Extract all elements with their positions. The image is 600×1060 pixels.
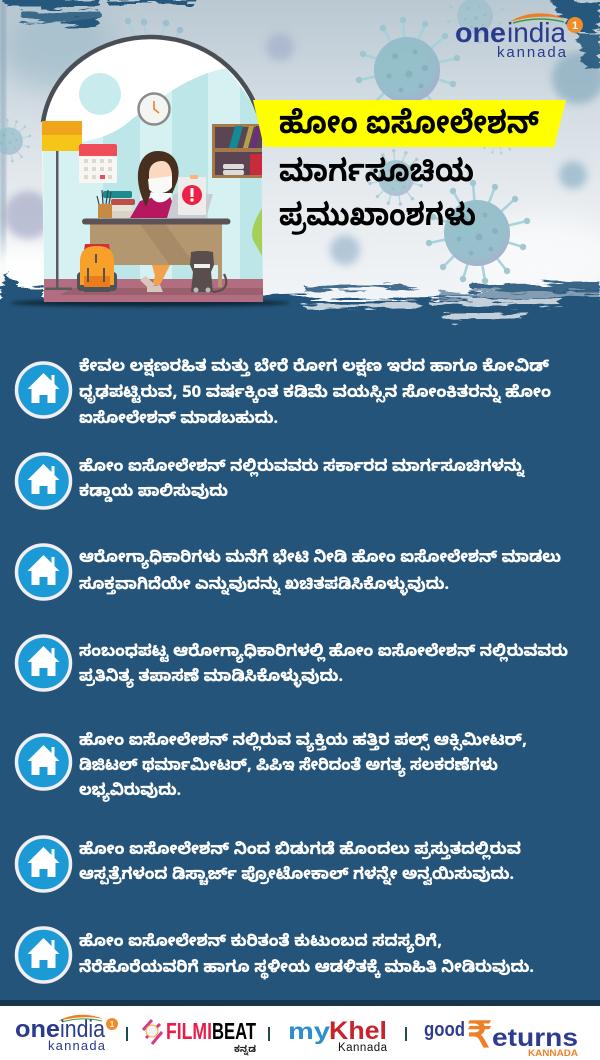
item 2 text: ಹೋಂ ಐಸೋಲೇಶನ್ ನಲ್ಲಿರುವವರು ಸರ್ಕಾರದ ಮಾರ್ಗಸೂಚಿಗಳನ್ನು [79, 458, 525, 480]
icon: home [16, 928, 70, 982]
item 4 text: ಪ್ರತಿನಿತ್ಯ ತಪಾಸಣೆ ಮಾಡಿಸಿಕೊಳ್ಳುವುದು. [79, 668, 343, 690]
footer divider [126, 1027, 128, 1041]
wall [43, 68, 263, 302]
icon: home [16, 636, 70, 690]
arch border [43, 37, 261, 122]
item 3 [16, 545, 561, 599]
item 7 text [79, 933, 534, 981]
title banner: yellow strip [253, 100, 566, 147]
body panel background [0, 302, 600, 1006]
arch sky [42, 37, 263, 302]
clock [138, 94, 170, 124]
footer logo: goodreturns: KANNADA [528, 1048, 578, 1059]
item 7 [16, 928, 534, 982]
icon: home [16, 735, 70, 789]
title line 2: ಮಾರ್ಗಸೂಚಿಯ [279, 155, 474, 198]
footer divider [268, 1027, 270, 1041]
item 5 text: ಹೋಂ ಐಸೋಲೇಶನ್ ನಲ್ಲಿರುವ ವ್ಯಕ್ತಿಯ ಹತ್ತಿರ ಪಲ್ಸ್ ಆಕ್ಸಿಮೀಟರ್, [79, 732, 527, 754]
item 7 text: ಹೋಂ ಐಸೋಲೇಶನ್ ಕುರಿತಂತೆ ಕುಟುಂಬದ ಸದಸ್ಯರಿಗೆ, [79, 933, 442, 955]
item 3 text [79, 549, 561, 598]
virus stalks above arch [125, 18, 183, 40]
footer bar [0, 1000, 600, 1060]
icon: home [16, 454, 70, 508]
virus: small top [447, 0, 504, 44]
item 4 text [79, 643, 568, 690]
calendar [79, 144, 117, 183]
item 1 text: ಕೇವಲ ಲಕ್ಷಣರಹಿತ ಮತ್ತು ಬೇರೆ ರೋಗ ಲಕ್ಷಣ ಇರದ ಹಾಗೂ ಕೋವಿಡ್ [79, 358, 550, 380]
item 1 [16, 358, 551, 432]
brush edge: banner bottom [0, 274, 600, 320]
item 5 text: ಲಭ್ಯವಿರುವುದು. [79, 782, 181, 804]
arch shadow [10, 300, 290, 306]
footer logo: goodreturns: good [424, 1019, 465, 1041]
footer logo: oneindia kannada [15, 1015, 118, 1053]
floor [44, 279, 263, 302]
icon: home [16, 545, 70, 599]
item 1 text [79, 358, 551, 432]
illustration: arch window [42, 37, 263, 302]
floor lamp [42, 121, 82, 290]
item 6 text: ಹೋಂ ಐಸೋಲೇಶನ್ ನಿಂದ ಬಿಡುಗಡೆ ಹೊಂದಲು ಪ್ರಸ್ತುತದಲ್ಲಿರುವ [79, 841, 521, 863]
background: top virus banner [0, 0, 600, 305]
logo: oneindia kannada top: 1 [572, 20, 578, 32]
rupee sign: ₹ [467, 1014, 492, 1055]
woman wearing mask [130, 151, 180, 218]
desk [82, 218, 230, 287]
title line 1: ಹೋಂ ಐಸೋಲೇಶನ್ [279, 107, 540, 150]
footer logo: filmibeat: FILMI [166, 1018, 212, 1044]
footer logo: mykhel: Khel [329, 1017, 387, 1045]
logo: oneindia kannada top: kannada [497, 44, 567, 61]
item 4 [16, 636, 568, 690]
item 1 text: ಐಸೋಲೇಶನ್ ಮಾಡಬಹುದು. [79, 410, 278, 432]
item 1 text: ಧೃಢಪಟ್ಟಿರುವ, 50 ವರ್ಷಕ್ಕಿಂತ ಕಡಿಮೆ ವಯಸ್ಸಿನ ಸೋಂಕಿತರನ್ನು ಹೋಂ [79, 384, 551, 406]
item 3 text: ಸೂಕ್ತವಾಗಿದೆಯೇ ಎನ್ನುವುದನ್ನು ಖಚಿತಪಡಿಸಿಕೊಳ್ಳುವುದು. [79, 576, 449, 598]
logo: oneindia kannada top: one [455, 17, 506, 48]
virus: behind title [368, 149, 425, 206]
footer logo: mykhel: my [288, 1018, 330, 1044]
virus: left edge [0, 119, 31, 162]
item 5 text [79, 732, 527, 804]
footer logo: oneindia kannada: india [60, 1016, 106, 1043]
footer logo: goodreturns: eturns [492, 1024, 578, 1052]
footer divider [405, 1027, 407, 1041]
cat [190, 251, 226, 292]
footer logo: oneindia kannada: 1 [110, 1020, 115, 1029]
item 3 text: ಆರೋಗ್ಯಾಧಿಕಾರಿಗಳು ಮನೆಗೆ ಭೇಟಿ ನೀಡಿ ಹೋಂ ಐಸೋಲೇಶನ್ ಮಾಡಲು [79, 549, 561, 571]
virus: large upper [356, 17, 460, 121]
plant edge [252, 208, 262, 256]
books and pencil cup [97, 190, 135, 218]
footer logo: oneindia kannada: kannada [48, 1038, 106, 1053]
footer logo: oneindia kannada: one [15, 1016, 60, 1043]
wall circle [79, 73, 121, 115]
backpack [77, 244, 117, 292]
brush lights over panel edge [300, 298, 560, 320]
footer logo: filmibeat: BEAT [212, 1018, 256, 1044]
wall stripes [103, 60, 263, 285]
title line 3: ಪ್ರಮುಖಾಂಶಗಳು [279, 199, 476, 242]
blurred virus spots [4, 33, 600, 265]
footer logo: filmibeat [143, 1018, 256, 1057]
icon: home [16, 837, 70, 891]
item 5 [16, 732, 527, 804]
laptop and warning sign [167, 175, 213, 218]
footer logo: filmibeat: ಕನ್ನಡ [234, 1044, 256, 1057]
virus: small title right [478, 113, 519, 154]
bookshelf [212, 124, 262, 178]
footer logo: mykhel: Kannada [338, 1042, 388, 1054]
legs and slippers [140, 265, 170, 292]
item 2 text [79, 458, 525, 505]
footer logo: mykhel [288, 1017, 388, 1054]
item 4 text: ಸಂಬಂಧಪಟ್ಟ ಆರೋಗ್ಯಾಧಿಕಾರಿಗಳಲ್ಲಿ ಹೋಂ ಐಸೋಲೇಶನ್ ನಲ್ಲಿರುವವರು [79, 643, 568, 665]
item 6 [16, 837, 521, 891]
brush edge: banner top [6, 0, 600, 70]
item 7 text: ನೆರೆಹೊರೆಯವರಿಗೆ ಹಾಗೂ ಸ್ಥಳೀಯ ಆಡಳಿತಕ್ಕೆ ಮಾಹಿತಿ ನೀಡಿರುವುದು. [79, 959, 534, 981]
logo: oneindia kannada top: india [507, 17, 566, 48]
item 6 text [79, 841, 521, 888]
icon: home [16, 363, 70, 417]
item 2 [16, 454, 525, 508]
item 6 text: ಆಸ್ಪತ್ರೆಗಳಂದ ಡಿಸ್ಚಾರ್ಜ್ ಪ್ರೋಟೋಕಾಲ್ ಗಳನ್ನೇ ಅನ್ವಯಿಸುವುದು. [79, 866, 514, 888]
item 2 text: ಕಡ್ಡಾಯ ಪಾಲಿಸುವುದು [79, 483, 228, 505]
footer logo: goodreturns [424, 1014, 578, 1059]
logo: oneindia kannada top [455, 13, 583, 61]
virus: large lower [426, 180, 530, 284]
item 5 text: ಡಿಜಿಟಲ್ ಥರ್ಮಾಮೀಟರ್, ಪಿಪಿಇ ಸೇರಿದಂತೆ ಅಗತ್ಯ ಸಲಕರಣೆಗಳು [79, 757, 498, 779]
